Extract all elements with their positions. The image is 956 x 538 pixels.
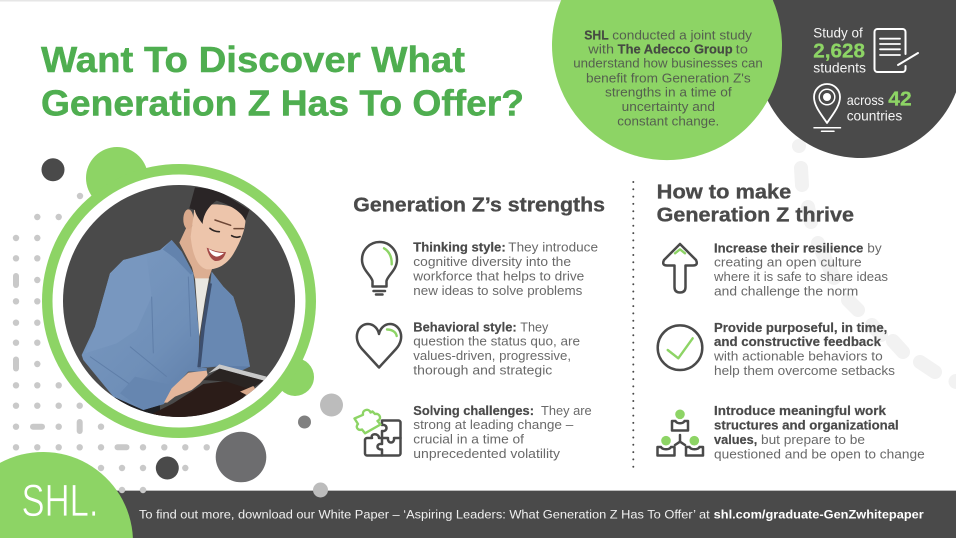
stat: countries: across xyxy=(847,92,884,108)
text: resilience: creating an open culture xyxy=(714,256,862,270)
decorative circles xyxy=(42,158,343,482)
dot pattern xyxy=(13,193,210,471)
stat: countries: countries xyxy=(847,107,902,123)
stat: students xyxy=(813,25,866,76)
stat: countries xyxy=(847,88,912,123)
stat: students: 2,628 xyxy=(813,40,865,62)
text: behavioral style: question the status quo, are xyxy=(413,335,580,349)
text: thinking style: new ideas to solve problems xyxy=(413,284,582,298)
portrait xyxy=(42,147,316,438)
intro text: benefit from Generation Z's xyxy=(586,71,751,85)
text: thinking style xyxy=(412,241,598,298)
text: thinking style: cognitive diversity into the xyxy=(413,255,571,269)
intro text: to xyxy=(736,42,748,56)
footer bar xyxy=(0,490,956,538)
text: behavioral style: thorough and strategic xyxy=(413,363,552,377)
text: resilience: and challenge the norm xyxy=(714,284,858,298)
icon: check circle xyxy=(658,325,702,370)
text: work structures: questioned and be open to change xyxy=(714,447,925,461)
item: behavioral style xyxy=(357,321,580,377)
text: feedback: and constructive feedback xyxy=(714,335,882,349)
item: resilience xyxy=(663,241,888,298)
text: resilience: where it is safe to share ideas xyxy=(713,270,888,284)
SHL logo corner xyxy=(0,452,133,538)
item: feedback xyxy=(658,321,895,378)
text: solving challenges: crucial in a time of xyxy=(413,433,525,447)
footer text: To find out more, download our White Paper – ‘Aspiring Leaders: What Generation Z Has To Offer’ at xyxy=(139,507,710,521)
intro text: constant change. xyxy=(617,115,719,129)
text: feedback: with actionable behaviors to xyxy=(713,350,883,364)
icon: team hierarchy xyxy=(658,410,703,456)
icon: up arrow xyxy=(663,244,697,292)
heading: how to make Generation Z thrive: How to make xyxy=(657,180,791,203)
intro text: strengths in a time of xyxy=(605,86,732,100)
text: solving challenges: They are xyxy=(541,404,592,418)
text: work structures: but prepare to be xyxy=(761,433,865,447)
intro text: conducted a joint study xyxy=(612,28,753,42)
text: feedback xyxy=(713,321,895,378)
text: thinking style: They introduce xyxy=(508,241,598,255)
text: work structures: Introduce meaningful work xyxy=(714,404,887,418)
title: Want To Discover What xyxy=(41,39,465,80)
item: solving challenges xyxy=(354,404,592,461)
text: resilience: by xyxy=(867,241,882,255)
text: resilience xyxy=(713,241,888,298)
text: work structures xyxy=(714,404,925,461)
text: thinking style: workforce that helps to drive xyxy=(412,269,584,283)
icon: light bulb xyxy=(362,242,397,294)
title: Generation Z Has To Offer? xyxy=(41,82,524,124)
stat: students: Study of xyxy=(813,25,863,41)
text: solving challenges: unprecedented volatility xyxy=(413,447,561,461)
footer text: shl.com/graduate-GenZwhitepaper xyxy=(714,507,924,521)
icon: location pin xyxy=(814,84,840,131)
intro circle xyxy=(552,0,782,160)
photo: student with tablet xyxy=(82,187,267,423)
intro text: understand how businesses can xyxy=(573,57,763,71)
text: work structures: structures and organizational xyxy=(714,418,899,432)
text: work structures: values, xyxy=(714,433,757,447)
item: work structures xyxy=(658,404,925,461)
text: feedback: help them overcome setbacks xyxy=(714,364,895,378)
text: thinking style: Thinking style: xyxy=(413,241,506,255)
text: behavioral style: Behavioral style: xyxy=(413,321,517,335)
text: solving challenges: Solving challenges: xyxy=(413,404,534,418)
text: feedback: Provide purposeful, in time, xyxy=(714,321,887,335)
heading: how to make Generation Z thrive xyxy=(657,180,854,227)
text: behavioral style: They xyxy=(520,321,549,335)
stat: students: students xyxy=(813,60,866,76)
heading: how to make Generation Z thrive: Generation Z thrive xyxy=(657,204,854,227)
icon: heart xyxy=(357,324,401,368)
intro text xyxy=(573,28,763,129)
text: behavioral style xyxy=(413,321,580,377)
item: thinking style xyxy=(362,241,598,298)
intro text: with xyxy=(587,42,614,56)
text: behavioral style: values-driven, progressive, xyxy=(413,349,571,363)
text: resilience: Increase their resilience xyxy=(714,241,863,255)
heading: strengths: Generation Z’s strengths xyxy=(353,194,605,217)
title xyxy=(41,39,524,124)
intro text: uncertainty and xyxy=(622,100,715,114)
SHL logo: SHL. xyxy=(22,475,98,526)
icon: document and pen xyxy=(874,29,918,72)
intro text: SHL xyxy=(584,28,609,42)
text: solving challenges xyxy=(413,404,592,461)
stat: countries: 42 xyxy=(888,88,912,110)
intro text: The Adecco Group xyxy=(618,42,733,56)
icon: puzzle pieces xyxy=(354,410,400,456)
text: solving challenges: strong at leading change – xyxy=(413,418,573,432)
stats circle xyxy=(757,0,956,158)
background dashed path xyxy=(799,146,956,389)
